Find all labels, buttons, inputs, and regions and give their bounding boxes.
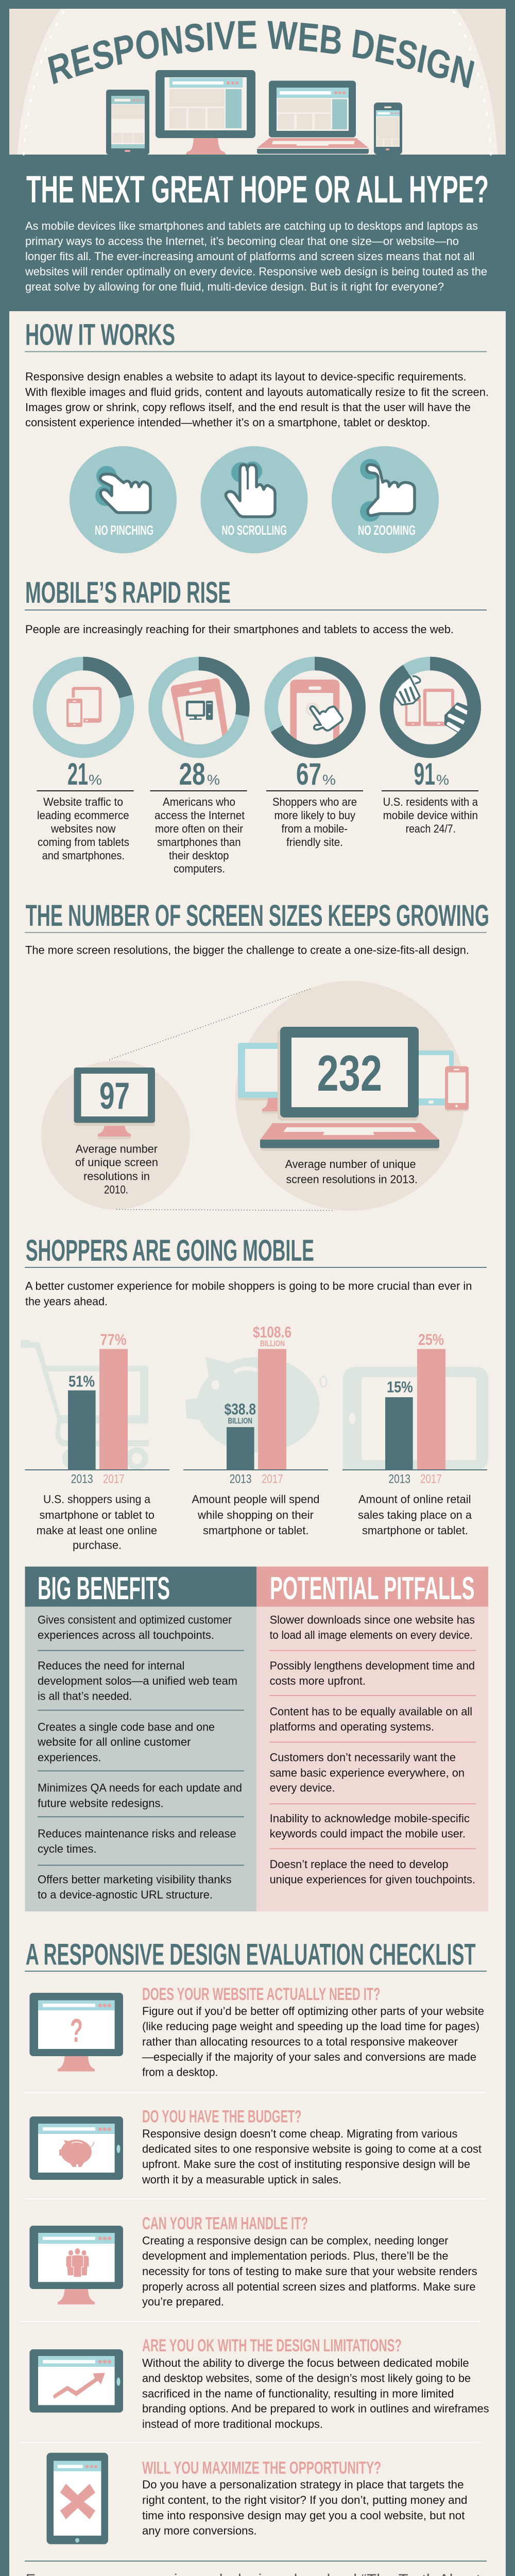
caption: 2010: 2010.: [104, 1183, 128, 1196]
icon: smartphone: [374, 103, 402, 155]
panel: potential pitfalls: every device.: [270, 1782, 335, 1794]
text block: intro: websites will render optimally on every device. Responsive web design is being touted as the: [25, 265, 487, 278]
text block: A better customer experience for mobile shoppers is going to be more crucial than ever in: [25, 1280, 472, 1293]
panel: potential pitfalls: costs more upfront.: [270, 1674, 366, 1687]
item: does your website need it: [142, 1985, 484, 2079]
caption: and smartphones.: [42, 849, 125, 862]
icon: no pinching: [70, 446, 177, 553]
text block: [25, 1280, 472, 1308]
item: maximize the opportunity: [142, 2459, 468, 2537]
caption: Amount people will spend: [192, 1493, 319, 1506]
text block: [25, 370, 489, 429]
caption: from a mobile-: [281, 822, 348, 835]
chart: mobile spend: 2013: [230, 1472, 251, 1486]
icon: monitor question: [29, 1993, 123, 2071]
item: does your website need it: from a desktop.: [142, 2066, 218, 2079]
panel: big benefits: experiences.: [38, 1751, 101, 1764]
caption: their desktop: [169, 849, 229, 862]
caption: smartphones than: [157, 836, 241, 849]
panel: big benefits: Offers better marketing visibility thanks: [38, 1873, 232, 1886]
panel: big benefits: [25, 1567, 256, 1911]
caption: [272, 795, 357, 849]
caption: access the Internet: [154, 809, 245, 822]
text block: People are increasingly reaching for their smartphones and tablets to access the web.: [25, 623, 454, 636]
icon: tablet and phone: [65, 687, 101, 728]
panel: big benefits: Reduces the need for internal: [38, 1659, 184, 1672]
item: does your website need it: rather than allocating resources to a total responsive makeover: [142, 2036, 458, 2048]
caption: [383, 795, 478, 835]
panel: big benefits: cycle times.: [38, 1842, 97, 1855]
caption: more likely to buy: [274, 809, 355, 822]
panel: potential pitfalls: Customers don’t necessarily want the: [270, 1751, 456, 1764]
chart: mobile spend: $38.8: [225, 1400, 256, 1418]
stat: 67: [296, 757, 321, 791]
caption: purchase.: [73, 1539, 122, 1552]
chart: donut 67%: [266, 664, 363, 849]
caption: 2013: [285, 1158, 418, 1186]
caption: U.S. shoppers using a: [43, 1493, 151, 1506]
icon: desktop monitor: [156, 70, 255, 155]
caption: [37, 795, 129, 862]
item: design limitations: sacrificed in the name of functionality, resulting in more limited: [142, 2387, 454, 2400]
caption: [154, 795, 245, 875]
item: do you have the budget: DO YOU HAVE THE BUDGET?: [142, 2107, 302, 2126]
chart: retail sales: 2017: [420, 1472, 442, 1486]
item: design limitations: Without the ability to diverge the focus between dedicated mobile: [142, 2357, 469, 2369]
panel: big benefits: development solos—a unified web team: [38, 1674, 237, 1687]
caption: make at least one online: [37, 1524, 157, 1537]
icon: tablet portrait: [106, 90, 149, 155]
panel: big benefits: website for all online customer: [37, 1736, 191, 1749]
text block: With flexible images and fluid grids, content and layouts automatically resize to fit the screen.: [25, 385, 489, 398]
chart: mobile spend: 2017: [262, 1472, 283, 1486]
chart: donut 28%: [150, 664, 247, 875]
section: checklist: [19, 1938, 489, 2544]
caption: U.S. residents with a: [383, 795, 478, 808]
item: can your team handle it: Creating a responsive design can be complex, needing longer: [142, 2234, 448, 2247]
chart: retail sales: 25%: [418, 1330, 444, 1349]
caption: leading ecommerce: [37, 809, 129, 822]
item: can your team handle it: necessity for tons of testing to make sure that your website renders: [142, 2265, 477, 2278]
chart: donut 28%: %: [207, 772, 220, 788]
panel: potential pitfalls: [256, 1567, 488, 1911]
panel: potential pitfalls: keywords could impact the mobile user.: [270, 1827, 466, 1840]
item: do you have the budget: Responsive design doesn’t come cheap. Migrating from various: [142, 2127, 457, 2140]
item: does your website need it: Figure out if you’d be better off optimizing other parts of your website: [142, 2005, 484, 2018]
caption: [358, 1493, 472, 1537]
panel: big benefits: experiences across all touchpoints.: [38, 1629, 214, 1641]
item: can your team handle it: you’re prepared.: [142, 2295, 224, 2308]
icon: tablet piggy bank: [29, 2116, 123, 2180]
chart: donut 67%: %: [322, 772, 336, 788]
caption: 2010: of unique screen: [75, 1156, 158, 1169]
chart: shoppers using mobile: 51%: [68, 1372, 95, 1390]
stat: 91: [414, 757, 435, 791]
caption: Website traffic to: [43, 795, 123, 808]
item: do you have the budget: worth it by a measurable uptick in sales.: [142, 2173, 341, 2186]
item: maximize the opportunity: time into responsive design may get you a cool website, but not: [142, 2509, 465, 2522]
text block: intro: As mobile devices like smartphones and tablets are catching up to desktops and laptops as: [25, 219, 478, 232]
section: shoppers: [21, 1234, 488, 1552]
chart: mobile spend: [183, 1323, 328, 1537]
caption: more often on their: [155, 822, 243, 835]
stat: 21: [67, 757, 88, 791]
chart: retail sales: 2013: [388, 1472, 410, 1486]
bar: 2017: [258, 1349, 286, 1470]
item: does your website need it: (like reducing page weight and speeding up the load time for pages): [142, 2020, 479, 2033]
icon: monitor team: [29, 2226, 123, 2304]
item: can your team handle it: properly across all potential screen sizes and platforms. Make sure: [142, 2280, 476, 2293]
caption: smartphone or tablet.: [362, 1524, 468, 1537]
item: do you have the budget: [142, 2107, 482, 2186]
bar: 2013: [68, 1391, 96, 1470]
panel: big benefits: Gives consistent and optimized customer: [38, 1613, 232, 1626]
icon: monitor question: ?: [70, 2012, 83, 2049]
caption: mobile device within: [383, 809, 478, 822]
caption: 2013: screen resolutions in 2013.: [286, 1173, 418, 1186]
icon: tablet x mark: [46, 2453, 108, 2544]
text block: intro: [25, 219, 487, 293]
icon: tablet growth arrow: [29, 2349, 123, 2413]
panel: big benefits: is all that’s needed.: [38, 1690, 132, 1703]
panel: potential pitfalls: Doesn’t replace the need to develop: [270, 1858, 448, 1871]
icon: piggy bank watermark: [185, 1357, 327, 1453]
text block: Responsive design enables a website to adapt its layout to device-specific requirements.: [25, 370, 467, 383]
item: design limitations: branding options. And be prepared to work in outlines and wireframes: [142, 2402, 489, 2415]
icon: devices held in hands: [393, 676, 470, 734]
item: maximize the opportunity: any more conversions.: [142, 2524, 257, 2537]
panel: potential pitfalls: Inability to acknowledge mobile-specific: [270, 1812, 470, 1825]
panel: potential pitfalls: same basic experience everywhere, on: [270, 1766, 465, 1779]
item: does your website need it: DOES YOUR WEBSITE ACTUALLY NEED IT?: [142, 1985, 380, 2004]
chart: mobile spend: $108.6: [253, 1323, 291, 1341]
text block: intro: longer fits all. The ever-increasing amount of platforms and screen sizes means that not all: [25, 250, 475, 263]
icon: cart watermark: [21, 1340, 149, 1470]
section: mobile's rapid rise: [25, 576, 487, 875]
heading: BIG BENEFITS: [38, 1571, 170, 1606]
chart: shoppers using mobile: 77%: [100, 1330, 127, 1349]
heading: SHOPPERS ARE GOING MOBILE: [26, 1234, 314, 1267]
section: screen sizes: [25, 899, 489, 1211]
panel: big benefits: to a device-agnostic URL structure.: [38, 1888, 213, 1901]
title: RESPONSIVE WEB DESIGN: [47, 21, 475, 89]
chart: shoppers using mobile: 2013: [71, 1472, 93, 1486]
icon: monitor 97: 97: [99, 1075, 130, 1117]
item: design limitations: [142, 2336, 489, 2431]
caption: websites now: [50, 822, 116, 835]
caption: smartphone or tablet.: [203, 1524, 309, 1537]
chart: donut 91%: %: [436, 772, 449, 788]
caption: sales taking place on a: [358, 1509, 472, 1521]
heading: HOW IT WORKS: [25, 318, 175, 351]
panel: potential pitfalls: Possibly lengthens development time and: [270, 1659, 475, 1672]
item: do you have the budget: dedicated sites to one responsive website is going to come at a cost: [142, 2143, 482, 2156]
panel: header banner: [9, 9, 506, 156]
chart: donut 21%: %: [89, 772, 102, 788]
icon: phone with tapping hand: [290, 680, 344, 744]
bar: 2013: [227, 1427, 254, 1470]
circle: 2010 backdrop: [41, 1060, 190, 1210]
icon: devices 232: 232: [317, 1045, 382, 1101]
caption: Shoppers who are: [272, 795, 357, 808]
icon: no scrolling: NO SCROLLING: [221, 522, 287, 538]
chart: retail sales: 15%: [387, 1378, 413, 1396]
section: how it works: [25, 318, 489, 553]
item: do you have the budget: upfront. Make sure the cost of instituting responsive design will be: [142, 2158, 470, 2171]
icon: no pinching: NO PINCHING: [95, 522, 153, 538]
panel: potential pitfalls: unique experiences for given touchpoints.: [270, 1873, 475, 1886]
bar: 2017: [417, 1349, 445, 1470]
panel: potential pitfalls: platforms and operating systems.: [270, 1720, 434, 1733]
panel: potential pitfalls: Slower downloads since one website has: [270, 1613, 475, 1626]
icon: no scrolling: [201, 446, 308, 553]
caption: friendly site.: [286, 836, 343, 849]
item: maximize the opportunity: WILL YOU MAXIMIZE THE OPPORTUNITY?: [142, 2459, 381, 2478]
icon: no zooming: [332, 446, 439, 553]
caption: Americans who: [163, 795, 235, 808]
caption: coming from tablets: [38, 836, 129, 849]
chart: retail sales: [342, 1330, 488, 1537]
text block: The more screen resolutions, the bigger the challenge to create a one-size-fits-all design.: [25, 944, 469, 957]
panel: big benefits: Reduces maintenance risks and release: [38, 1827, 236, 1840]
caption: [37, 1493, 157, 1552]
chart: mobile spend: BILLION: [228, 1417, 252, 1426]
caption: 2013: Average number of unique: [285, 1158, 416, 1171]
panel: big benefits: Creates a single code base and one: [38, 1720, 215, 1733]
text block: consistent experience intended—whether it’s on a smartphone, tablet or desktop.: [25, 416, 431, 429]
caption: reach 24/7.: [406, 822, 456, 835]
icon: monitor 97: [74, 1067, 155, 1139]
icon: devices 232: [238, 1027, 469, 1151]
caption: computers.: [174, 862, 225, 875]
caption: smartphone or tablet to: [39, 1509, 154, 1521]
chart: donut 91%: [382, 664, 478, 835]
item: does your website need it: —especially if the majority of your sales and conversions are made: [142, 2050, 476, 2063]
chart: shoppers using mobile: 2017: [103, 1472, 125, 1486]
circle: 2013 backdrop: [235, 981, 465, 1211]
item: maximize the opportunity: right content, to the right visitor? If you don’t, putting money and: [142, 2494, 468, 2506]
text block: the years ahead.: [25, 1295, 108, 1308]
icon: laptop: [257, 81, 369, 154]
item: design limitations: instead of more traditional mockups.: [142, 2418, 323, 2431]
item: can your team handle it: [142, 2214, 477, 2308]
icon: no zooming: NO ZOOMING: [358, 522, 416, 538]
heading: MOBILE’S RAPID RISE: [25, 576, 231, 609]
item: maximize the opportunity: Do you have a personalization strategy in place that targets the: [142, 2478, 464, 2491]
chart: mobile spend: BILLION: [260, 1340, 285, 1348]
icon: tablet watermark: [343, 1367, 488, 1470]
caption: [192, 1493, 319, 1537]
panel: big benefits: Minimizes QA needs for each update and: [38, 1782, 242, 1794]
item: can your team handle it: development and implementation periods. Plus, there’ll be the: [142, 2249, 448, 2262]
panel: big benefits: future website redesigns.: [38, 1797, 164, 1809]
text block: Images grow or shrink, copy reflows itself, and the end result is that the user will have the: [25, 401, 471, 414]
item: can your team handle it: CAN YOUR TEAM HANDLE IT?: [142, 2214, 308, 2233]
text block: intro: great solve by allowing for one fluid, multi-device design. But is it right for everyone?: [25, 280, 444, 293]
stat: 28: [179, 757, 205, 791]
chart: donut 21%: [37, 664, 134, 862]
bar: 2017: [99, 1349, 128, 1470]
panel: potential pitfalls: to load all image elements on every device.: [270, 1629, 473, 1641]
item: design limitations: and desktop websites, some of the design’s most likely going to be: [142, 2371, 471, 2384]
icon: tilted phone with desktop: [171, 678, 228, 744]
caption: 2010: [75, 1143, 158, 1196]
caption: 2010: Average number: [76, 1143, 158, 1156]
caption: while shopping on their: [197, 1509, 314, 1521]
panel: potential pitfalls: Content has to be equally available on all: [270, 1705, 472, 1718]
chart: shoppers using mobile: [21, 1330, 169, 1552]
bar: 2013: [385, 1397, 413, 1470]
text block: intro: primary ways to access the Internet, it’s becoming clear that one size—or website—no: [25, 235, 459, 247]
caption: Amount of online retail: [358, 1493, 471, 1506]
caption: 2010: resolutions in: [83, 1170, 150, 1183]
